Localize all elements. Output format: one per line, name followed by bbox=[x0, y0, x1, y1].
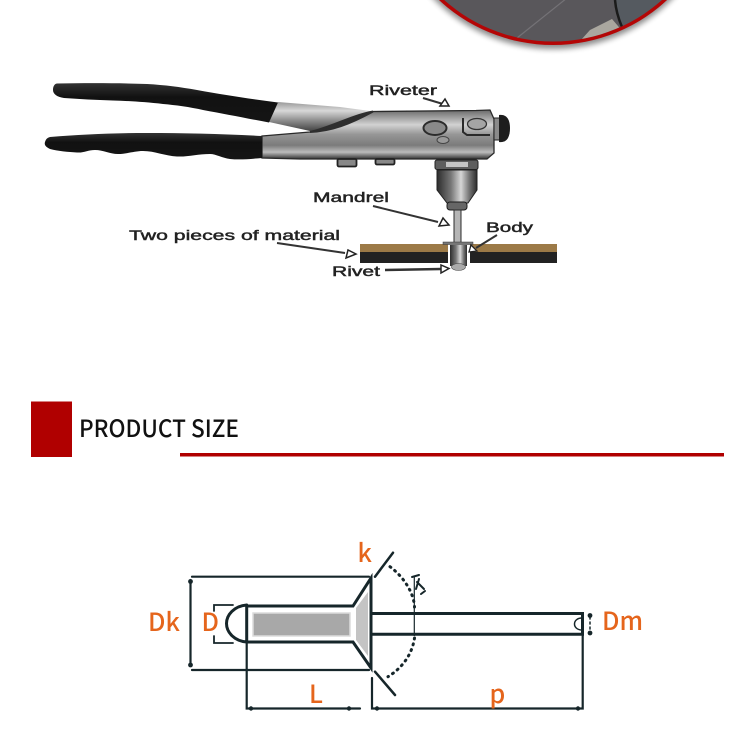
photo circle cropped at top bbox=[430, 0, 676, 53]
label: Mandrel bbox=[313, 189, 449, 226]
dimension label: k: k bbox=[358, 534, 372, 570]
dimension lines bbox=[188, 577, 592, 711]
label: Two pieces of material bbox=[129, 227, 356, 258]
mandrel bbox=[454, 210, 461, 243]
label: Body bbox=[469, 219, 533, 252]
lower black handle with finger grooves bbox=[45, 133, 262, 159]
label: Rivet bbox=[332, 263, 449, 279]
dimension label: p: p bbox=[490, 675, 505, 711]
heading underline bbox=[180, 453, 724, 456]
rivet buttons on tool body bbox=[424, 118, 490, 144]
rivet outline bbox=[226, 578, 582, 668]
heading: product size: PRODUCT SIZE bbox=[79, 409, 239, 444]
rivet dimension drawing bbox=[148, 534, 643, 711]
dimension label: L: L bbox=[309, 675, 323, 711]
label: Riveter bbox=[369, 82, 449, 106]
riveter tool illustration bbox=[45, 83, 557, 270]
dimension label: Dm: Dm bbox=[602, 602, 643, 638]
dimension label: D: D bbox=[202, 603, 219, 639]
countersink angle marks bbox=[375, 553, 425, 695]
rivet body bbox=[443, 242, 473, 270]
nose collar and cone bbox=[435, 160, 478, 210]
two pieces of material bbox=[360, 244, 557, 263]
upper silver arm bbox=[269, 102, 378, 131]
label: Riveter: Riveter bbox=[369, 82, 437, 98]
section marker: red square bbox=[31, 402, 72, 457]
lower silver arm and tool body bbox=[262, 110, 494, 159]
label: Two pieces of material: Two pieces of material bbox=[129, 227, 340, 243]
label: Rivet: Rivet bbox=[332, 263, 380, 279]
label: Mandrel: Mandrel bbox=[313, 189, 389, 205]
label: Body: Body bbox=[486, 219, 533, 235]
upper black handle bbox=[53, 83, 278, 122]
dark wedge between arms bbox=[310, 112, 373, 132]
rear knob bbox=[494, 115, 510, 142]
bolts under body bbox=[338, 159, 394, 166]
dimension label: Dk: Dk bbox=[148, 603, 180, 639]
